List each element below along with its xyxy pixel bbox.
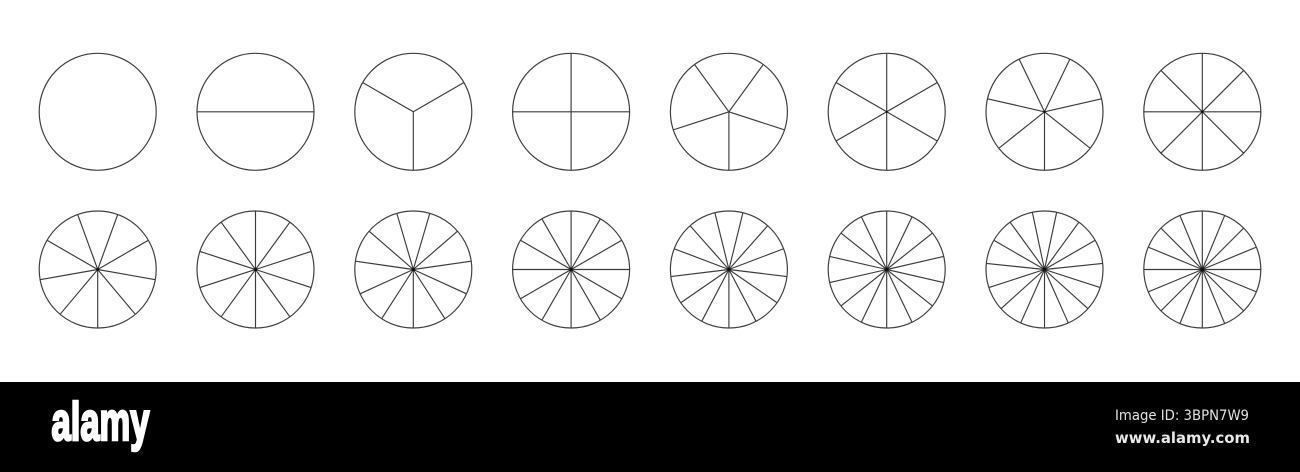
footer band — [0, 382, 1300, 472]
logo: alamy: alamy — [52, 392, 150, 452]
circle: 3 parts — [355, 53, 472, 170]
circle: 7 parts — [986, 53, 1103, 170]
circle: 15 parts — [986, 211, 1103, 328]
circle: 6 parts — [828, 53, 945, 170]
circle: 16 parts — [1144, 211, 1261, 328]
circle: 5 parts — [670, 53, 787, 170]
circle: 4 parts — [513, 53, 630, 170]
circle: 13 parts — [670, 211, 787, 328]
circle: 1 whole — [39, 53, 156, 170]
circle: 10 parts — [197, 211, 314, 328]
circle: 8 parts — [1144, 53, 1261, 170]
website: www.alamy.com — [1115, 429, 1250, 447]
circle: 14 parts — [828, 211, 945, 328]
circle: 12 parts — [513, 211, 630, 328]
circle: 11 parts — [355, 211, 472, 328]
image id: Image ID: 3BPN7W9 — [1115, 408, 1249, 424]
circle: 9 parts — [39, 211, 156, 328]
circle: 2 parts — [197, 53, 314, 170]
